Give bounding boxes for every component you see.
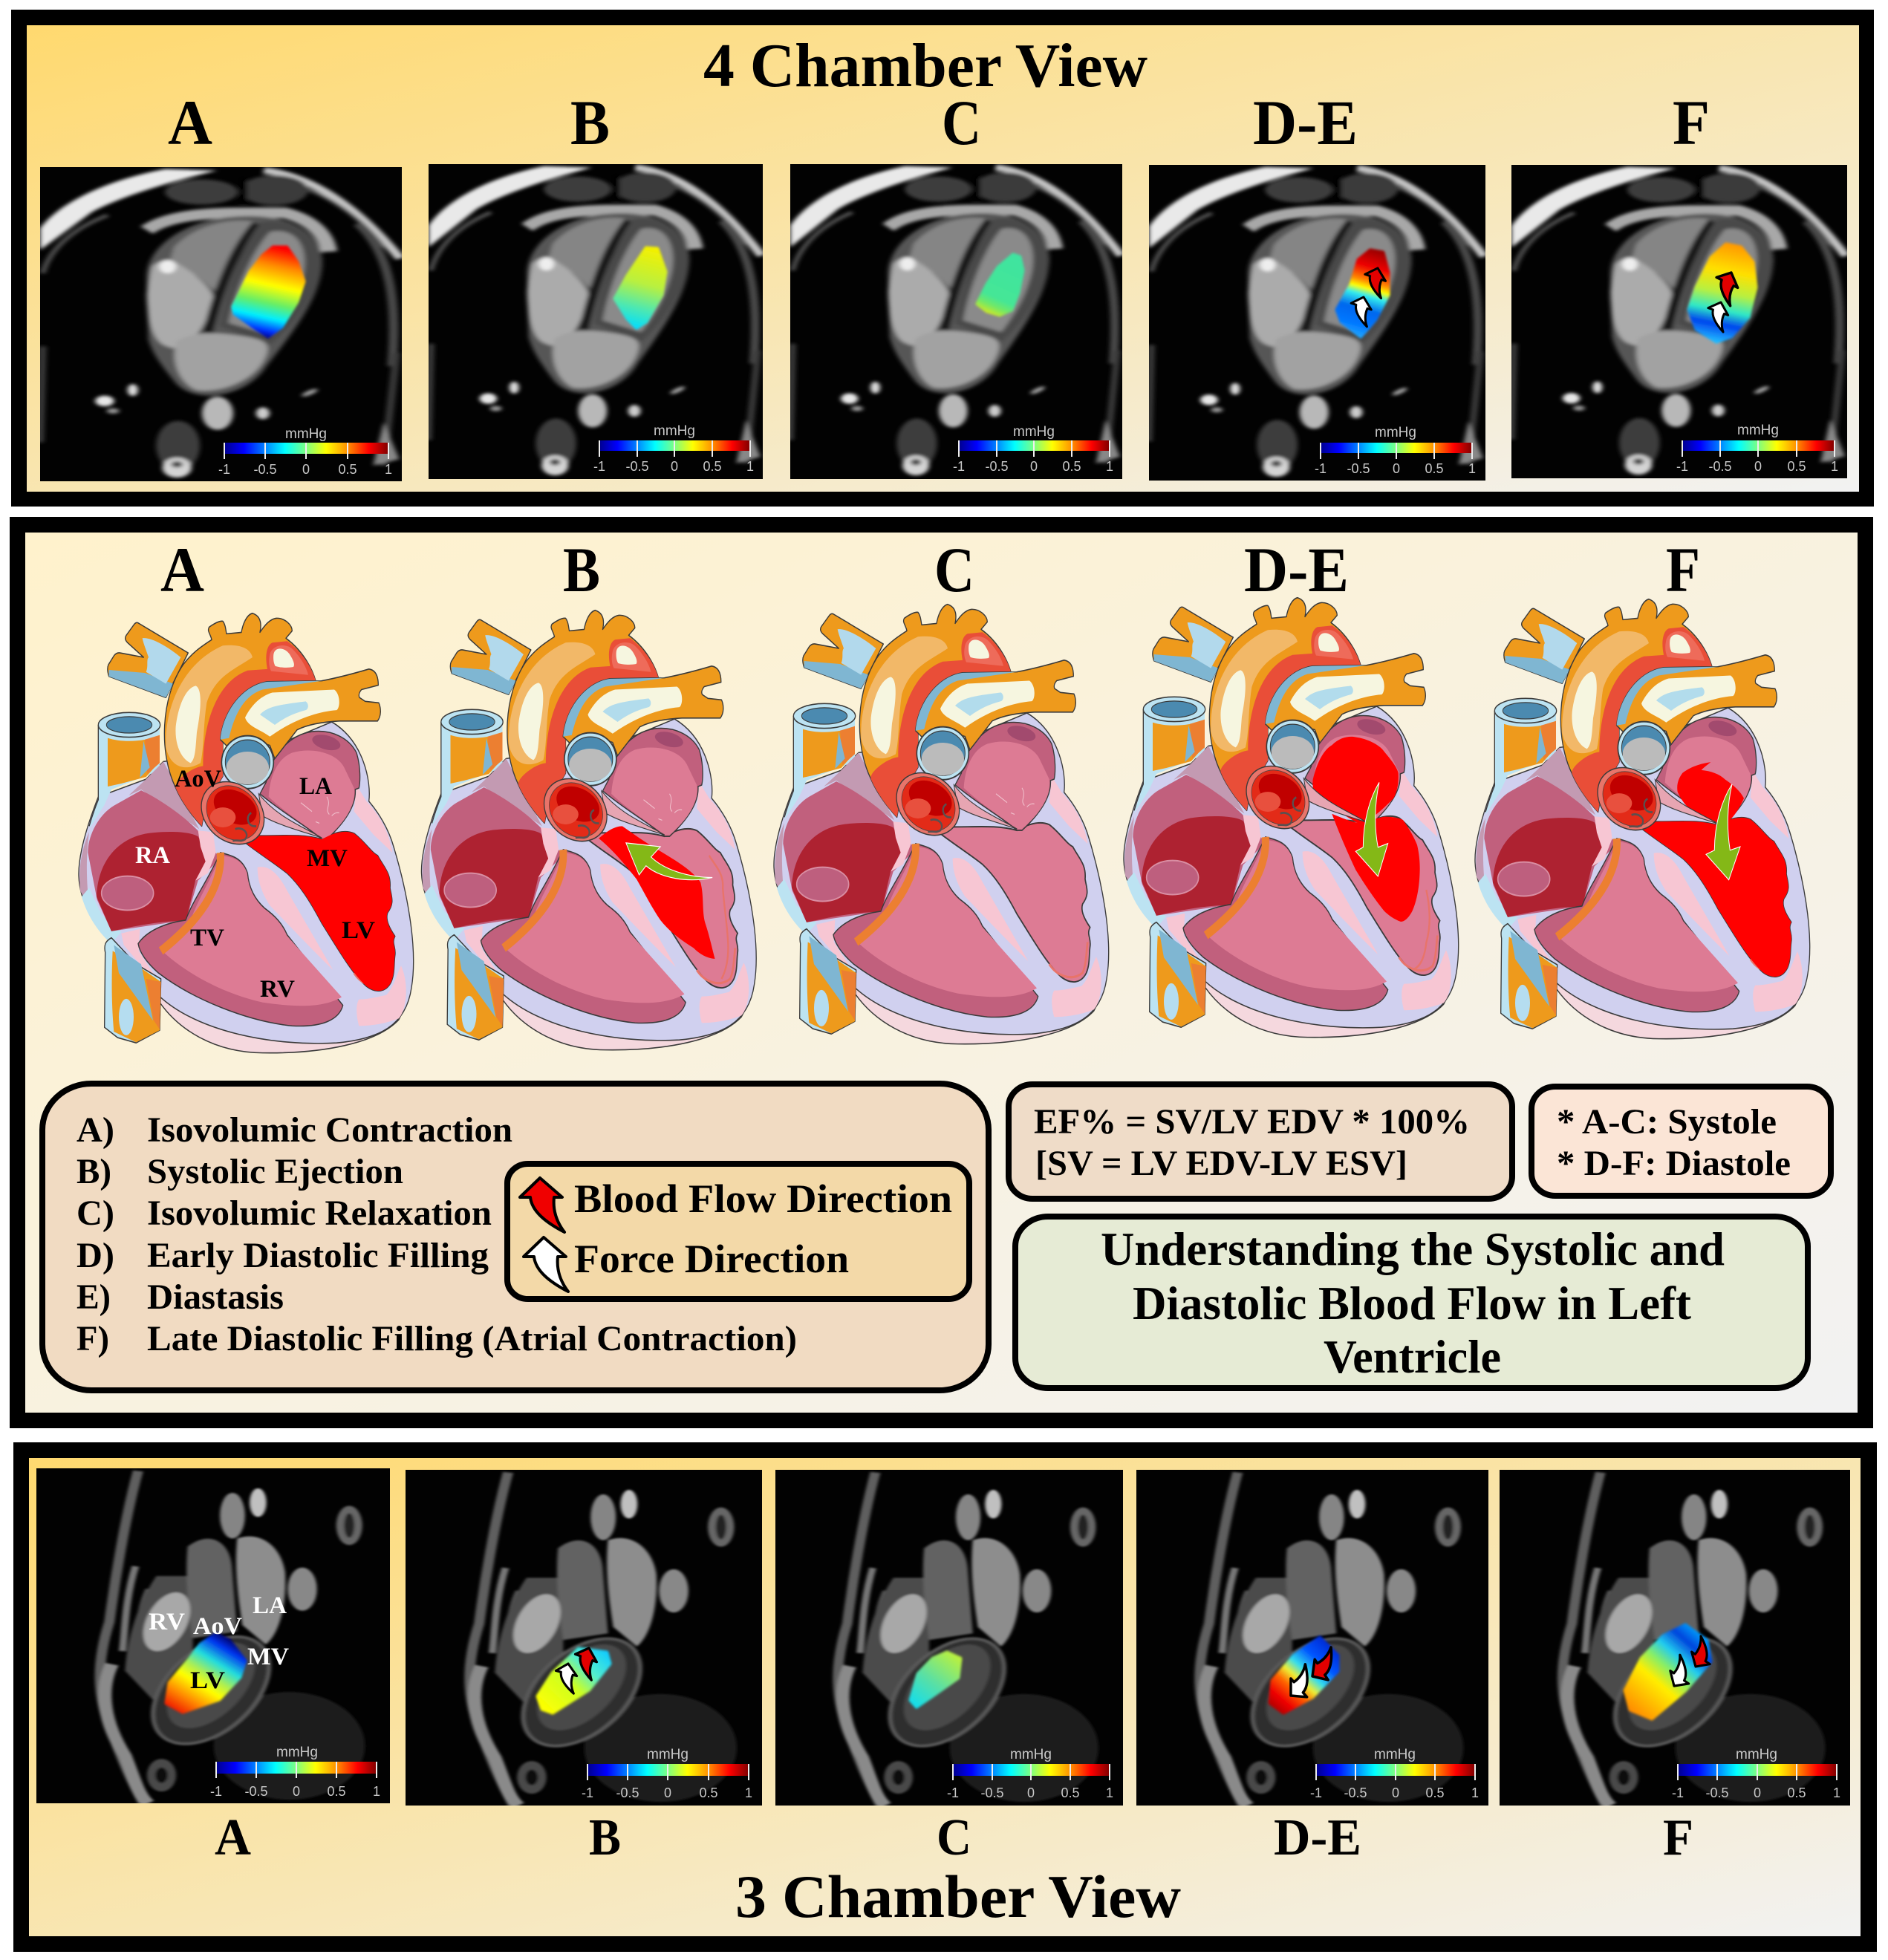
mri 4ch B: -0.5	[625, 459, 649, 474]
mri 4ch C: 1	[1106, 459, 1113, 474]
phase labels: C	[937, 1809, 971, 1866]
cardiac phase list box	[42, 1084, 989, 1390]
heart labels: RA	[135, 842, 170, 869]
mri 3ch C	[775, 1470, 1123, 1806]
mri 4ch F: 0.5	[1787, 459, 1806, 474]
mri 3ch B: 0	[664, 1785, 671, 1800]
phase labels: F	[1666, 534, 1700, 605]
mri 4ch D-E: 0.5	[1425, 461, 1444, 476]
heart B: systolic ejection	[421, 611, 756, 1050]
phase labels: C	[934, 534, 974, 605]
mri 4ch A: 1	[385, 462, 392, 477]
mri 3ch B: mmHg	[647, 1747, 689, 1762]
mri 3ch C: -1	[947, 1785, 959, 1800]
mri 4ch A	[40, 167, 402, 481]
phase labels: C	[942, 87, 981, 158]
mri 4ch D-E: -0.5	[1347, 461, 1370, 476]
mri 4ch B	[429, 164, 763, 479]
mri 3ch B: 0.5	[699, 1785, 718, 1800]
main title box: Ventricle	[1324, 1330, 1501, 1383]
legend box: Blood Flow Direction	[574, 1176, 952, 1221]
phase labels: D-E	[1274, 1809, 1361, 1866]
cardiac phase list box: B)	[77, 1152, 111, 1191]
mri 3ch D-E: 0	[1392, 1785, 1399, 1800]
phase labels: A	[160, 534, 204, 605]
mri 4ch B: -1	[593, 459, 605, 474]
mri 4ch B: 0.5	[703, 459, 722, 474]
mri 3ch A: RV	[149, 1609, 185, 1635]
mri 3ch F: mmHg	[1736, 1747, 1777, 1762]
mri 3ch B: -0.5	[616, 1785, 639, 1800]
icon: white arrow	[524, 1237, 568, 1292]
mri 3ch A: LV	[190, 1667, 225, 1694]
mri 3ch D-E: -1	[1310, 1785, 1322, 1800]
mri 3ch D-E	[1136, 1470, 1488, 1806]
phase labels: F	[1663, 1809, 1693, 1866]
phase labels: D-E	[1253, 87, 1358, 158]
phase labels: B	[570, 87, 610, 158]
cardiac phase list box: C)	[77, 1194, 114, 1233]
cardiac phase list box: E)	[77, 1277, 111, 1317]
mri 4ch D-E: 0	[1393, 461, 1400, 476]
cardiac phase list box: F)	[77, 1319, 109, 1358]
systole diastole box: * D-F: Diastole	[1557, 1144, 1791, 1183]
heart labels: LV	[342, 917, 375, 944]
phase labels: A	[168, 87, 212, 158]
mri 4ch C: 0.5	[1062, 459, 1081, 474]
mri 3ch A: 0	[293, 1784, 300, 1799]
heart labels: LA	[299, 773, 332, 800]
mri 4ch F: 1	[1831, 459, 1838, 474]
ef formula box	[1009, 1084, 1512, 1199]
mri 4ch D-E	[1149, 165, 1485, 481]
mri 4ch C: -0.5	[985, 459, 1009, 474]
mri 4ch A: -1	[218, 462, 230, 477]
phase labels	[168, 87, 1710, 158]
phase labels: B	[563, 534, 600, 605]
mri 4ch A: mmHg	[285, 426, 327, 442]
mri 3ch C: 0.5	[1061, 1785, 1080, 1800]
mri 4ch A: -0.5	[253, 462, 277, 477]
title: 3 chamber view: 3 Chamber View	[735, 1863, 1181, 1930]
mri 3ch F: 0	[1754, 1785, 1761, 1800]
mri 4ch F: -1	[1676, 459, 1688, 474]
mri 4ch D-E: 1	[1468, 461, 1476, 476]
title: 4 chamber view: 4 Chamber View	[703, 31, 1148, 100]
mri 4ch B: 1	[746, 459, 754, 474]
panel: cardiac cycle	[10, 517, 1873, 1428]
systole diastole box: * A-C: Systole	[1557, 1102, 1777, 1142]
mri 3ch A: MV	[247, 1644, 289, 1670]
mri 4ch C	[790, 164, 1122, 479]
mri 4ch C: 0	[1030, 459, 1038, 474]
mri 4ch B: mmHg	[654, 423, 695, 439]
cardiac phase list box: Isovolumic Relaxation	[147, 1194, 492, 1233]
mri 3ch C: 1	[1106, 1785, 1113, 1800]
heart D-E: early diastolic filling	[1124, 598, 1459, 1038]
cardiac phase list box: Late Diastolic Filling (Atrial Contraction)	[147, 1319, 797, 1358]
mri 4ch C: -1	[953, 459, 965, 474]
mri 3ch A: mmHg	[276, 1745, 318, 1760]
cardiac phase list box: Early Diastolic Filling	[147, 1236, 489, 1275]
panel: 4 chamber view	[11, 10, 1874, 507]
cardiac phase list box: Isovolumic Contraction	[147, 1110, 512, 1150]
ef formula box: EF% = SV/LV EDV * 100%	[1034, 1102, 1470, 1142]
mri 3ch F	[1500, 1470, 1850, 1806]
mri 4ch B: 0	[671, 459, 678, 474]
heart C: isovolumic relaxation	[774, 605, 1109, 1044]
mri 3ch B: 1	[745, 1785, 752, 1800]
mri 4ch D-E: -1	[1315, 461, 1327, 476]
cardiac phase list box: D)	[77, 1236, 114, 1275]
legend box: Force Direction	[574, 1237, 849, 1281]
icon: red arrow	[520, 1178, 564, 1232]
mri 3ch A: 1	[373, 1784, 380, 1799]
mri 3ch C: 0	[1027, 1785, 1035, 1800]
mri 4ch D-E: mmHg	[1375, 425, 1416, 440]
phase labels: B	[589, 1809, 621, 1866]
mri 3ch B	[406, 1470, 762, 1806]
mri 3ch B: -1	[582, 1785, 593, 1800]
mri 3ch F: 0.5	[1787, 1785, 1806, 1800]
mri 4ch F: mmHg	[1737, 423, 1779, 438]
mri 4ch F: -0.5	[1708, 459, 1732, 474]
phase labels	[215, 1809, 1693, 1866]
mri 3ch D-E: 0.5	[1425, 1785, 1445, 1800]
heart labels: MV	[307, 845, 348, 872]
mri 3ch D-E: -0.5	[1344, 1785, 1367, 1800]
mri 3ch A: AoV	[193, 1613, 242, 1640]
mri 4ch F	[1511, 165, 1847, 478]
phase labels: D-E	[1244, 534, 1349, 605]
mri 3ch A: -0.5	[244, 1784, 268, 1799]
ef formula box: [SV = LV EDV-LV ESV]	[1035, 1144, 1407, 1183]
phase labels	[160, 534, 1700, 605]
heart labels: TV	[190, 925, 224, 951]
heart labels: RV	[260, 976, 295, 1003]
mri 4ch C: mmHg	[1013, 424, 1055, 440]
main title box: Diastolic Blood Flow in Left	[1133, 1277, 1692, 1329]
cardiac phase list box: A)	[77, 1110, 114, 1150]
cardiac phase list box: Systolic Ejection	[147, 1152, 403, 1191]
phase labels: F	[1673, 87, 1710, 158]
mri 3ch A: -1	[210, 1784, 222, 1799]
mri 3ch F: -1	[1672, 1785, 1684, 1800]
mri 3ch F: 1	[1833, 1785, 1840, 1800]
phase labels: A	[215, 1809, 251, 1866]
panel: 3 chamber view	[13, 1442, 1877, 1952]
mri 3ch C: mmHg	[1010, 1747, 1052, 1762]
heart labels	[135, 766, 375, 1003]
mri 3ch A: LA	[253, 1592, 287, 1619]
heart labels: AoV	[175, 766, 221, 792]
heart A: isovolumic contraction	[79, 613, 414, 1053]
mri 3ch D-E: 1	[1471, 1785, 1479, 1800]
heart F: late diastolic filling	[1475, 599, 1810, 1039]
mri 3ch A: 0.5	[327, 1784, 346, 1799]
main title box: Understanding the Systolic and	[1101, 1222, 1725, 1275]
mri 4ch A: 0	[302, 462, 310, 477]
mri 3ch C: -0.5	[980, 1785, 1004, 1800]
legend box	[507, 1164, 969, 1299]
cardiac phase list box: Diastasis	[147, 1277, 284, 1317]
main title box	[1015, 1217, 1808, 1388]
mri 4ch A: 0.5	[338, 462, 357, 477]
mri 4ch F: 0	[1754, 459, 1762, 474]
mri 3ch D-E: mmHg	[1374, 1747, 1416, 1762]
mri 3ch F: -0.5	[1705, 1785, 1729, 1800]
systole diastole box	[1531, 1087, 1831, 1196]
mri 3ch A	[36, 1468, 390, 1803]
